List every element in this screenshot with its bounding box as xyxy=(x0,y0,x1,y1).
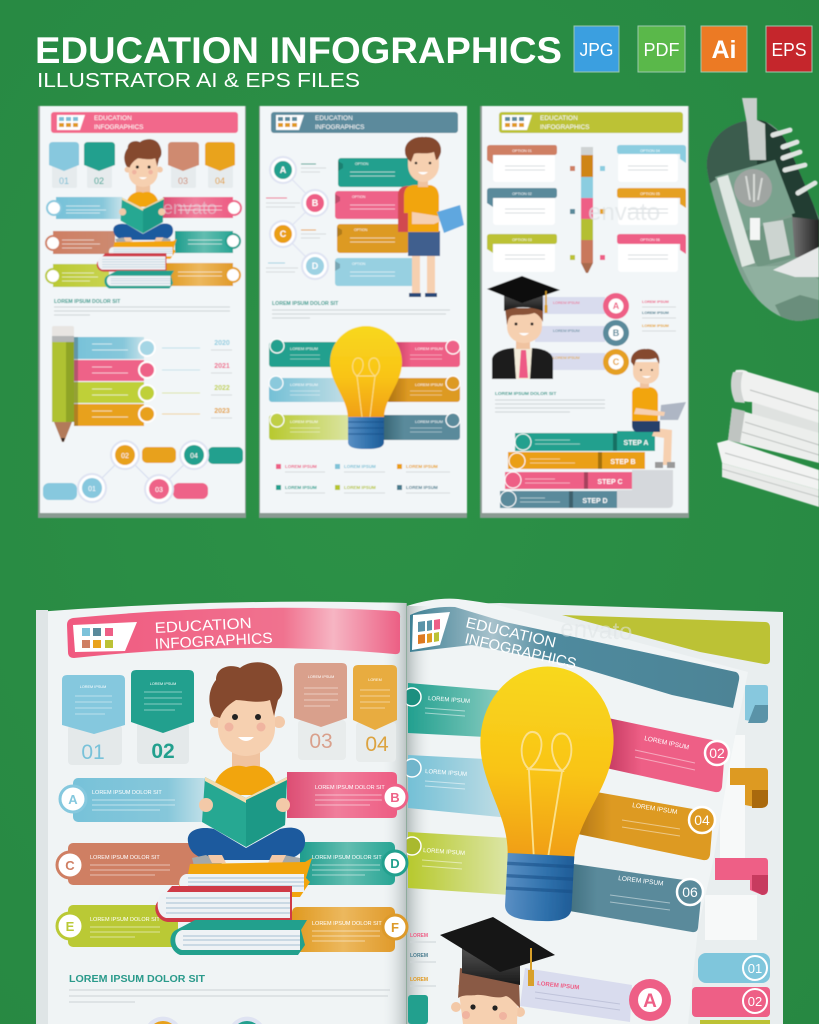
header title: EDUCATION xyxy=(464,614,558,652)
lavender label bars with ABC badges: LOREM IPSUM xyxy=(642,324,669,328)
icon: PDF file badge: PDF xyxy=(644,40,680,60)
bulb feature bars: LOREM IPSUM xyxy=(415,346,443,351)
lorem ipsum text block xyxy=(69,974,390,1002)
page header: INFOGRAPHICS xyxy=(540,124,590,131)
left side small legend: LOREM xyxy=(410,953,428,959)
numbered tabs: LOREM xyxy=(368,678,382,682)
feature ribbons with letter badges xyxy=(57,772,407,952)
step staircase: STEP C xyxy=(597,479,623,486)
option cards left: OPTION 01 xyxy=(512,149,532,153)
icon: Ai file badge: Ai xyxy=(712,36,736,64)
lavender label bars with ABC badges: A xyxy=(613,301,620,311)
watermark: envato xyxy=(588,199,660,226)
option cards left xyxy=(487,145,557,272)
header logo xyxy=(412,612,450,650)
option tabs 01-04: 03 xyxy=(178,176,188,186)
title block: ILLUSTRATOR AI & EPS FILES xyxy=(37,70,360,92)
page header: INFOGRAPHICS xyxy=(154,630,273,653)
light bulb xyxy=(330,326,402,449)
numbered tabs: 01 xyxy=(81,741,105,764)
ribbons with letter badges xyxy=(46,197,241,287)
option tabs 01-04: 02 xyxy=(94,176,104,186)
pencil timeline: 2022 xyxy=(214,385,230,392)
lavender label bars with ABC badges: LOREM IPSUM xyxy=(553,329,580,333)
option cards right: OPTION 06 xyxy=(640,238,660,242)
ribbons beside standing boy: OPTION xyxy=(352,262,366,266)
lettered circle chain A-D xyxy=(266,157,328,279)
feature ribbons with letter badges: E xyxy=(66,919,75,934)
left feature ribbons: LOREM IPSUM xyxy=(425,769,467,778)
lorem ipsum text block: LOREM IPSUM DOLOR SIT xyxy=(69,974,205,985)
icon: JPG file badge: JPG xyxy=(580,40,614,60)
ribbons beside standing boy: OPTION xyxy=(355,162,369,166)
connected circles chain: 03 xyxy=(155,487,163,494)
ribbons beside standing boy: OPTION xyxy=(352,195,366,199)
page header: EDUCATION xyxy=(94,115,132,122)
right feature ribbons: 06 xyxy=(682,884,698,900)
lorem ipsum text block: LOREM IPSUM DOLOR SIT xyxy=(54,299,121,305)
option tabs 01-04: 01 xyxy=(59,176,69,186)
page header: INFOGRAPHICS xyxy=(94,124,144,131)
decoration: rolled paper tubes xyxy=(717,370,819,507)
left feature ribbons xyxy=(403,683,510,895)
open brochure: right back page xyxy=(415,603,783,1024)
step staircase: STEP A xyxy=(624,440,648,447)
reading boy on stacked books xyxy=(97,139,177,288)
title block xyxy=(35,30,562,92)
right feature ribbons: LOREM IPSUM xyxy=(644,735,690,751)
connected circles chain: 01 xyxy=(88,486,96,493)
lettered circle chain A-D: A xyxy=(280,165,287,175)
page header: INFOGRAPHICS xyxy=(315,124,365,131)
ribbons beside standing boy xyxy=(335,158,418,286)
back ribbons and cards: 01 xyxy=(748,961,762,976)
icon: EPS file badge xyxy=(766,26,812,72)
lavender label bars with ABC badges xyxy=(535,293,676,375)
watermark: envato xyxy=(163,198,217,218)
panel: graduate and steps infographic page xyxy=(480,106,689,518)
lorem ipsum text block xyxy=(495,391,605,412)
bottom circles peeking xyxy=(148,1017,262,1024)
bulb feature bars: LOREM IPSUM xyxy=(290,382,318,387)
bulb feature bars: LOREM IPSUM xyxy=(415,382,443,387)
right feature ribbons: LOREM IPSUM xyxy=(618,875,664,888)
lavender label bars with ABC badges: LOREM IPSUM xyxy=(553,301,580,305)
option cards right: OPTION 05 xyxy=(640,192,660,196)
back ribbons and cards xyxy=(692,685,770,1024)
lavender label bars with ABC badges: B xyxy=(613,328,620,338)
decoration: zipped pencil case xyxy=(700,98,819,325)
numbered tabs: 03 xyxy=(309,730,333,753)
ribbons beside standing boy: OPTION xyxy=(354,228,368,232)
numbered tabs xyxy=(62,663,397,765)
feature ribbons with letter badges: C xyxy=(65,858,75,873)
lavender label bars with ABC badges: LOREM IPSUM xyxy=(553,356,580,360)
feature ribbons with letter badges: LOREM IPSUM DOLOR SIT xyxy=(312,855,382,861)
numbered tabs: LOREM IPSUM xyxy=(80,685,106,689)
lettered circle chain A-D: C xyxy=(280,229,287,239)
step staircase xyxy=(500,431,673,508)
colour legend: LOREM IPSUM xyxy=(285,485,317,490)
numbered tabs: 04 xyxy=(365,733,389,756)
connected circles chain: 02 xyxy=(121,453,129,460)
step staircase: STEP D xyxy=(582,498,608,505)
page header: EDUCATION xyxy=(154,615,252,637)
pencil timeline: 2021 xyxy=(214,363,230,370)
colour legend xyxy=(276,464,450,493)
numbered tabs: 02 xyxy=(151,740,175,763)
bulb feature bars: LOREM IPSUM xyxy=(415,419,443,424)
lorem ipsum text block xyxy=(272,301,450,318)
watermark: envato xyxy=(560,615,633,646)
connected circles chain xyxy=(43,441,243,503)
option cards left: OPTION 02 xyxy=(512,192,532,196)
lorem ipsum text block: LOREM IPSUM DOLOR SIT xyxy=(272,301,339,307)
panel: reading boy infographic page xyxy=(38,106,246,518)
page header xyxy=(51,112,238,133)
lavender label with badge A: A xyxy=(643,991,657,1012)
left side small legend: LOREM xyxy=(410,977,428,983)
feature ribbons with letter badges: LOREM IPSUM DOLOR SIT xyxy=(92,790,162,796)
colour legend: LOREM IPSUM xyxy=(406,485,438,490)
open brochure: right front page xyxy=(403,599,748,1024)
icon: PDF file badge xyxy=(638,26,685,72)
feature ribbons with letter badges: A xyxy=(68,792,78,807)
colour legend: LOREM IPSUM xyxy=(344,485,376,490)
segmented pencil xyxy=(570,147,605,273)
seated boy with laptop xyxy=(631,349,686,468)
lime back header xyxy=(562,615,770,664)
option tabs 01-04 xyxy=(49,142,235,188)
feature ribbons with letter badges: LOREM IPSUM DOLOR SIT xyxy=(90,917,160,923)
bulb feature bars: LOREM IPSUM xyxy=(290,419,318,424)
lettered circle chain A-D: D xyxy=(312,261,319,271)
right feature ribbons: LOREM IPSUM xyxy=(632,802,678,816)
standing boy with backpack xyxy=(398,137,464,297)
back ribbons and cards: 02 xyxy=(748,994,762,1009)
feature ribbons with letter badges: B xyxy=(390,790,400,805)
feature ribbons with letter badges: D xyxy=(390,856,400,871)
pencil timeline: 2020 xyxy=(214,340,230,347)
lavender label bars with ABC badges: C xyxy=(613,357,620,367)
big graduate head with cap xyxy=(440,917,555,1024)
feature ribbons with letter badges: LOREM IPSUM DOLOR SIT xyxy=(90,855,160,861)
icon: JPG file badge xyxy=(574,26,619,72)
feature ribbons with letter badges: F xyxy=(391,920,399,935)
big light bulb xyxy=(471,663,617,924)
connected circles chain: 04 xyxy=(190,453,198,460)
page header xyxy=(499,112,683,133)
icon: EPS file badge: EPS xyxy=(772,40,806,60)
bulb feature bars: LOREM IPSUM xyxy=(290,346,318,351)
page header: EDUCATION xyxy=(315,115,353,122)
feature ribbons with letter badges: LOREM IPSUM DOLOR SIT xyxy=(315,785,385,791)
panel: light bulb infographic page xyxy=(259,106,467,518)
lavender label bars with ABC badges: LOREM IPSUM xyxy=(642,311,669,315)
icon: Ai file badge xyxy=(701,26,747,72)
lettered circle chain A-D: B xyxy=(312,198,319,208)
left side small legend xyxy=(408,933,436,1024)
title block: EDUCATION INFOGRAPHICS xyxy=(35,30,562,71)
option cards right: OPTION 04 xyxy=(640,149,660,153)
colour legend: LOREM IPSUM xyxy=(285,464,317,469)
page header xyxy=(67,608,400,658)
page header: EDUCATION xyxy=(540,115,578,122)
numbered tabs: LOREM IPSUM xyxy=(150,682,176,686)
lavender label bars with ABC badges: LOREM IPSUM xyxy=(642,300,669,304)
big reading boy on books xyxy=(155,662,312,955)
lavender label with badge A xyxy=(520,968,671,1022)
open brochure: left page xyxy=(36,602,407,1024)
pencil timeline: 2023 xyxy=(214,408,230,415)
option cards left: OPTION 03 xyxy=(512,238,532,242)
left side small legend: LOREM xyxy=(410,933,428,939)
feature ribbons with letter badges: LOREM IPSUM DOLOR SIT xyxy=(312,921,382,927)
page header xyxy=(271,112,458,133)
option tabs 01-04: 04 xyxy=(215,176,225,186)
step staircase: STEP B xyxy=(610,459,636,466)
bulb feature bars xyxy=(269,339,460,440)
pencil timeline xyxy=(52,326,232,442)
number badges xyxy=(677,741,729,905)
right feature ribbons: 04 xyxy=(694,812,710,828)
header title: INFOGRAPHICS xyxy=(463,630,578,673)
left feature ribbons: LOREM IPSUM xyxy=(428,696,470,705)
graduate figure xyxy=(487,276,560,379)
right feature ribbons: 02 xyxy=(709,745,725,761)
option cards right xyxy=(617,145,686,272)
colour legend: LOREM IPSUM xyxy=(344,464,376,469)
numbered tabs: LOREM IPSUM xyxy=(308,675,334,679)
right feature ribbons xyxy=(552,718,729,932)
lorem ipsum text block xyxy=(54,299,230,315)
lavender label with badge A: LOREM IPSUM xyxy=(537,981,580,991)
lorem ipsum text block: LOREM IPSUM DOLOR SIT xyxy=(495,391,556,397)
page header xyxy=(410,607,739,708)
left feature ribbons: LOREM IPSUM xyxy=(423,848,465,857)
colour legend: LOREM IPSUM xyxy=(406,464,438,469)
